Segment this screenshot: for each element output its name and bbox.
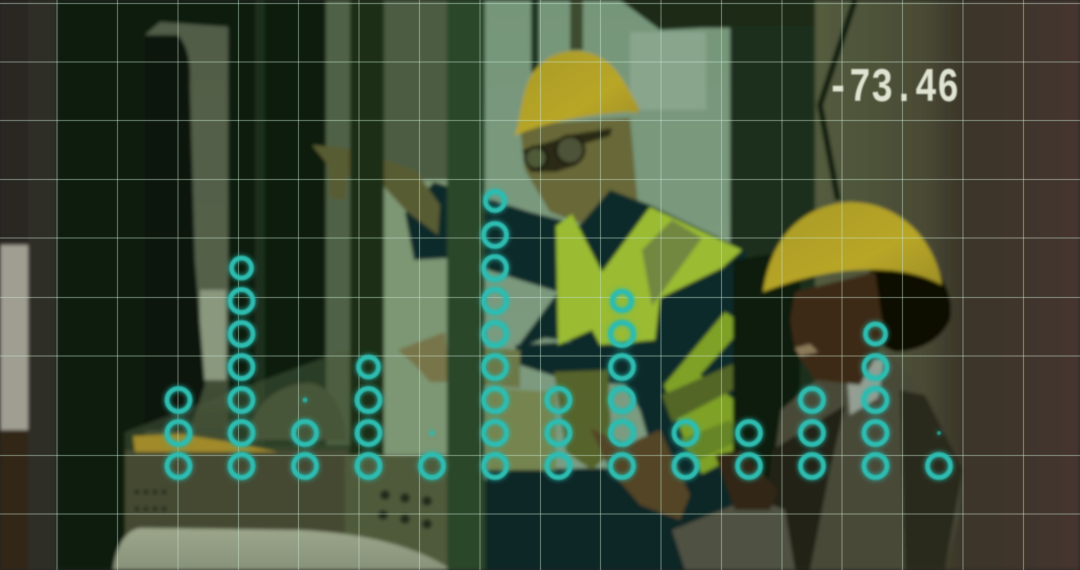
bar 8 [610, 292, 634, 478]
woman's hard hat [763, 202, 942, 292]
bar 11 [800, 388, 824, 478]
man's hard hat [514, 51, 639, 136]
cab pillars in front of the man [350, 0, 485, 570]
dot-matrix bar chart of teal rings [167, 192, 950, 478]
forklift dashboard and seat [113, 350, 455, 570]
floating numeric readout: -73.46 [827, 62, 959, 116]
man in hard hat and hi-vis vest [312, 51, 780, 570]
bar 10 [738, 422, 760, 478]
bar 12 [864, 324, 887, 478]
bar 4 [357, 357, 380, 478]
bar 5 [420, 432, 444, 478]
bar 1 [167, 388, 190, 478]
bar 9 [674, 422, 697, 478]
bar 13 [928, 432, 950, 478]
bar 7 [547, 388, 570, 478]
bar 6 [484, 192, 506, 478]
woman in hard hat and grey suit [590, 202, 963, 570]
bar 2 [230, 258, 253, 478]
tablet [554, 370, 612, 470]
bar 3 [294, 398, 316, 478]
